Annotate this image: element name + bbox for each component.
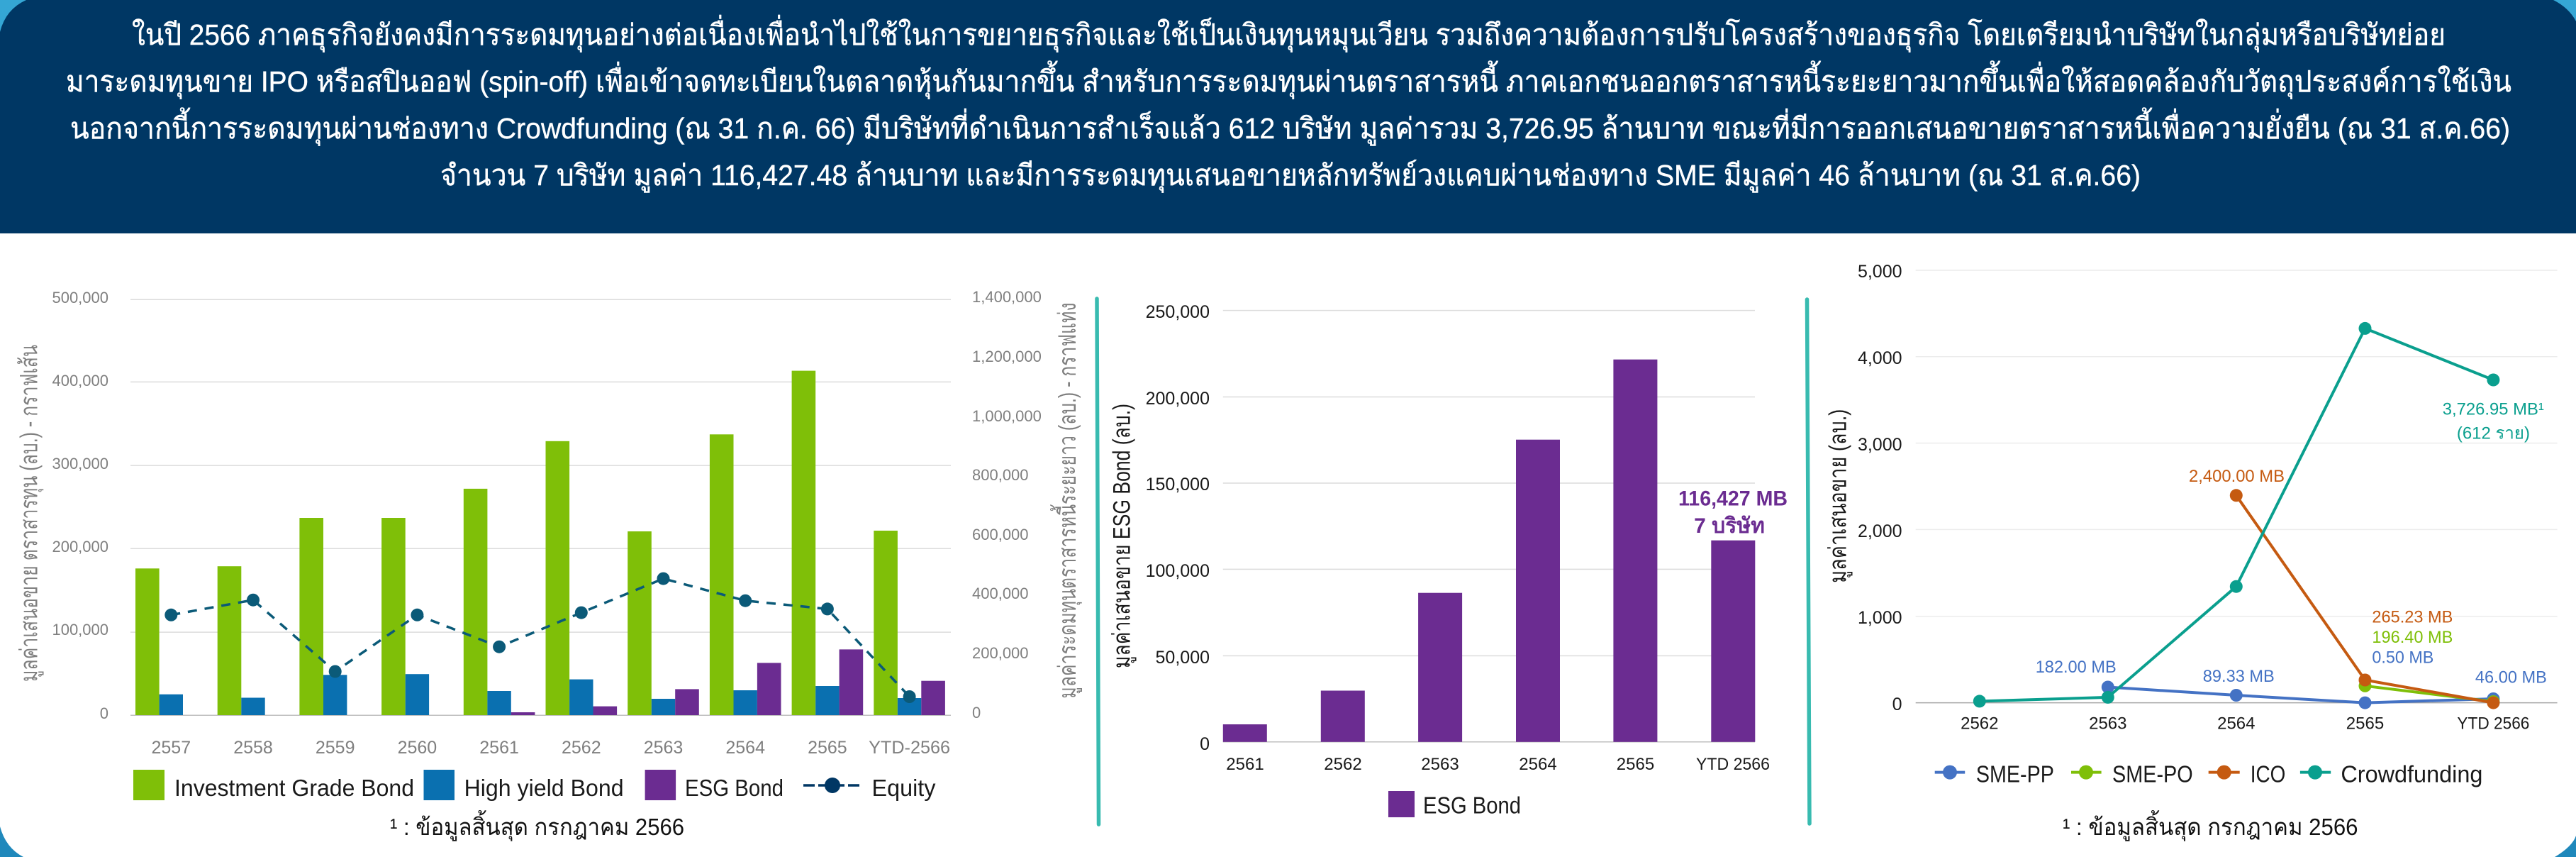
legend xyxy=(133,770,936,801)
y axis labels: 100,000 xyxy=(1146,561,1210,581)
header text line 1: ในปี 2566 ภาคธุรกิจยังคงมีการระดมทุนอย่างต่อเนื่องเพื่อนำไปใช้ในการขยายธุรกิจและใช้เป็นเงินทุนหมุนเวียน รวมถึงความต้องการปรับโครงสร้างของธุรกิจ โดยเตรียมนำบริษัทในกลุ่มหรือบริษัทย่อย xyxy=(132,15,2446,52)
legend xyxy=(1935,761,2482,787)
data labels: 265.23 MB xyxy=(2372,608,2453,627)
category labels: YTD 2566 xyxy=(2457,714,2529,734)
line: Crowdfunding xyxy=(1973,322,2499,707)
category labels: 2565 xyxy=(1617,755,1654,774)
category labels: 2564 xyxy=(2217,714,2255,734)
category labels: 2563 xyxy=(644,738,683,758)
y axis title: มูลค่าเสนอขาย ESG Bond (ลบ.) xyxy=(1109,404,1136,668)
line: Equity xyxy=(165,573,916,703)
category labels xyxy=(1226,755,1770,774)
category labels: 2562 xyxy=(1961,714,1998,734)
data labels: (612 ราย) xyxy=(2457,424,2530,443)
left axis labels: 500,000 xyxy=(52,289,108,306)
right axis labels: 200,000 xyxy=(972,644,1029,662)
y axis labels: 5,000 xyxy=(1858,262,1902,282)
y axis labels: 250,000 xyxy=(1146,302,1210,322)
legend: ESG Bond xyxy=(685,775,784,801)
header text line 3: นอกจากนี้การระดมทุนผ่านช่องทาง Crowdfunding (ณ 31 ก.ค. 66) มีบริษัทที่ดำเนินการสำเร็จแล้ว 612 บริษัท มูลค่ารวม 3,726.95 ล้านบาท ขณะที่มีการออกเสนอขายตราสารหนี้เพื่อความยั่งยืน (ณ 31 ส.ค.66) xyxy=(70,107,2510,146)
right axis labels: 400,000 xyxy=(972,585,1029,602)
divider 1 xyxy=(1097,299,1099,824)
right axis labels: 1,000,000 xyxy=(972,407,1042,425)
right axis labels: 0 xyxy=(972,704,981,721)
category labels: 2562 xyxy=(562,738,601,758)
annotation: YTD value: 7 บริษัท xyxy=(1694,514,1765,538)
panel: white chart area xyxy=(0,233,2576,857)
left axis labels: 400,000 xyxy=(52,372,108,389)
right axis labels: 1,200,000 xyxy=(972,348,1042,365)
divider 2 xyxy=(1807,299,1810,824)
category labels: 2562 xyxy=(1324,755,1362,774)
right axis labels: 800,000 xyxy=(972,466,1029,484)
category labels: 2564 xyxy=(1519,755,1557,774)
category labels: 2563 xyxy=(1421,755,1459,774)
y axis labels: 2,000 xyxy=(1858,521,1902,541)
category labels: 2559 xyxy=(316,738,355,758)
left axis labels: 300,000 xyxy=(52,455,108,472)
header text line 4: จำนวน 7 บริษัท มูลค่า 116,427.48 ล้านบาท และมีการระดมทุนเสนอขายหลักทรัพย์วงแคบผ่านช่องทาง SME มีมูลค่า 46 ล้านบาท (ณ 31 ส.ค.66) xyxy=(440,159,2141,193)
line: SME-PP xyxy=(2102,681,2499,709)
bars: ESG Bond xyxy=(511,649,945,715)
legend xyxy=(1388,791,1521,819)
line: ICO xyxy=(2230,489,2499,709)
left axis title: มูลค่าเสนอขาย ตราสารทุน (ลบ.) - กราฟเส้น xyxy=(16,345,44,682)
category labels: YTD 2566 xyxy=(1696,755,1770,774)
left axis labels: 100,000 xyxy=(52,621,108,638)
legend: SME-PO xyxy=(2112,761,2193,787)
y axis labels: 50,000 xyxy=(1156,648,1210,668)
annotation: YTD value xyxy=(1678,487,1788,538)
category labels: 2563 xyxy=(2089,714,2126,734)
category labels: 2561 xyxy=(1226,755,1264,774)
bars: High yield Bond xyxy=(160,674,921,715)
y axis labels: 3,000 xyxy=(1858,435,1902,455)
data labels: 0.50 MB xyxy=(2372,648,2433,667)
data labels: 3,726.95 MB¹ xyxy=(2443,400,2544,419)
y axis labels: 1,000 xyxy=(1858,608,1902,628)
right axis labels: 1,400,000 xyxy=(972,288,1042,306)
y axis labels: 0 xyxy=(1892,695,1902,714)
line: SME-PO xyxy=(2358,680,2499,708)
left axis labels: 200,000 xyxy=(52,538,108,555)
data labels: 182.00 MB xyxy=(2036,658,2117,677)
y axis labels: 200,000 xyxy=(1146,389,1210,409)
y axis labels xyxy=(1858,262,1902,714)
legend: SME-PP xyxy=(1976,761,2054,787)
y axis labels: 0 xyxy=(1200,734,1210,754)
data labels: 89.33 MB xyxy=(2203,667,2275,686)
legend: ICO xyxy=(2251,761,2285,787)
footnote: ¹ : ข้อมูลสิ้นสุด กรกฎาคม 2566 xyxy=(2063,810,2358,841)
category labels xyxy=(151,738,950,758)
chart: long-term debt and equity fundraising (bars and line) xyxy=(16,288,1082,841)
left axis labels: 0 xyxy=(100,704,108,722)
legend: Equity xyxy=(872,775,936,801)
y axis labels: 150,000 xyxy=(1146,475,1210,494)
data labels xyxy=(2036,400,2547,687)
y axis labels: 4,000 xyxy=(1858,348,1902,368)
bars xyxy=(1223,360,1755,742)
data labels: 196.40 MB xyxy=(2372,628,2453,647)
category labels: 2557 xyxy=(151,738,191,758)
footnote: ¹ : ข้อมูลสิ้นสุด กรกฎาคม 2566 xyxy=(390,810,684,841)
panel: header banner xyxy=(0,0,2576,233)
right axis title: มูลค่าระดมทุนตราสารหนี้ระยะยาว (ลบ.) - กราฟแท่ง xyxy=(1050,302,1082,698)
category labels: 2565 xyxy=(808,738,847,758)
category labels xyxy=(1961,714,2529,734)
y axis title: มูลค่าเสนอขาย (ลบ.) xyxy=(1825,409,1853,583)
right axis labels: 600,000 xyxy=(972,526,1029,543)
category labels: 2564 xyxy=(725,738,765,758)
annotation: YTD value: 116,427 MB xyxy=(1678,487,1788,511)
chart: ESG Bond xyxy=(1109,302,1788,819)
data labels: 2,400.00 MB xyxy=(2189,467,2285,486)
right axis labels xyxy=(972,288,1042,721)
category labels: 2558 xyxy=(233,738,273,758)
category labels: 2565 xyxy=(2346,714,2384,734)
category labels: 2560 xyxy=(398,738,437,758)
legend: Crowdfunding xyxy=(2341,761,2482,787)
legend: High yield Bond xyxy=(464,775,624,801)
left axis labels xyxy=(52,289,108,722)
header text line 2: มาระดมทุนขาย IPO หรือสปินออฟ (spin-off) เพื่อเข้าจดทะเบียนในตลาดหุ้นกันมากขึ้น สำหรับการระดมทุนผ่านตราสารหนี้ ภาคเอกชนออกตราสารหนี้ระยะยาวมากขึ้นเพื่อให้สอดคล้องกับวัตถุประสงค์การใช้เงิน xyxy=(66,60,2511,99)
bars: Investment Grade Bond xyxy=(135,371,898,715)
category labels: YTD-2566 xyxy=(869,738,950,758)
data labels: 46.00 MB xyxy=(2475,668,2547,687)
chart: SME, ICO and crowdfunding xyxy=(1825,262,2558,841)
category labels: 2561 xyxy=(479,738,519,758)
y axis labels xyxy=(1146,302,1210,754)
legend: Investment Grade Bond xyxy=(174,775,414,801)
legend: ESG Bond xyxy=(1423,792,1521,819)
